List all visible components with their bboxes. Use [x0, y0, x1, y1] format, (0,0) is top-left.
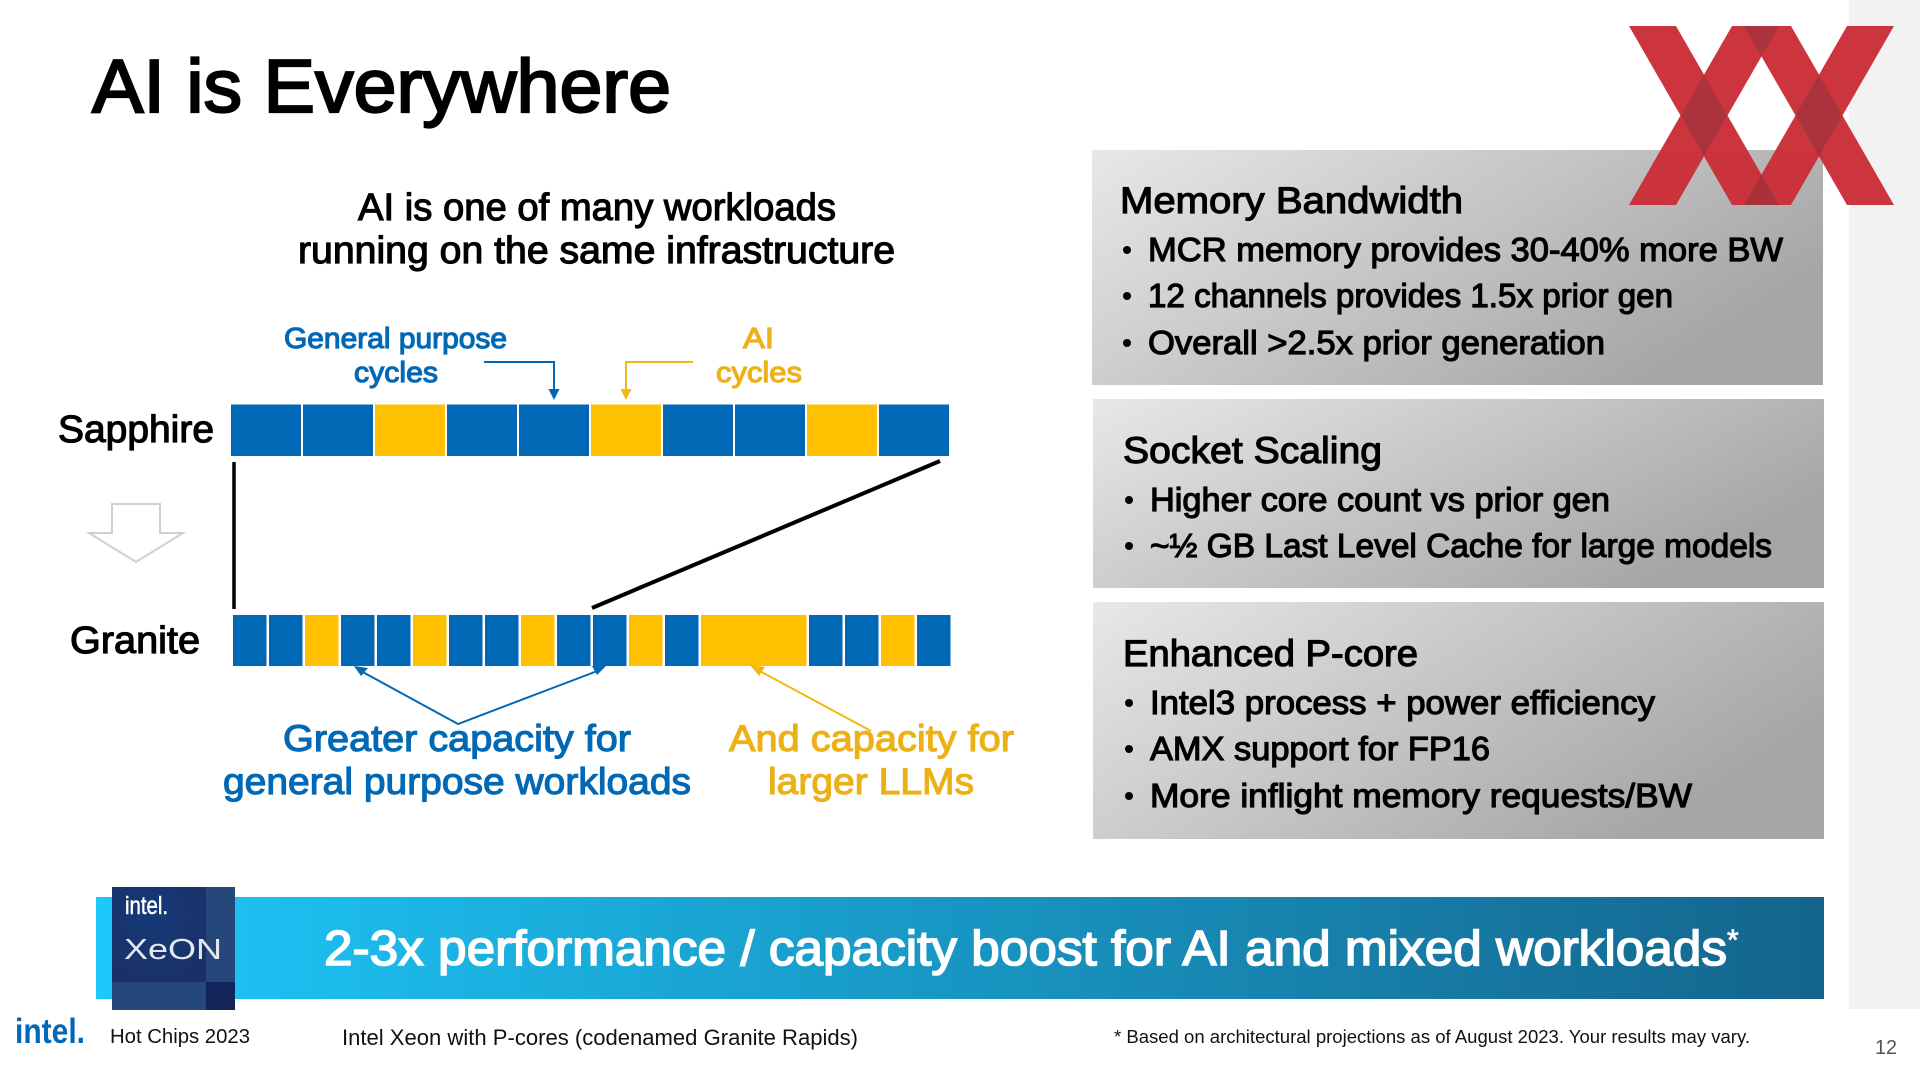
label: AI cycles: AI: [743, 323, 774, 355]
title: AI is Everywhere: [92, 44, 671, 128]
label: AI cycles: cycles: [716, 357, 802, 389]
logo: intel: intel.: [15, 1012, 85, 1051]
footer: product note: Intel Xeon with P-cores (codenamed Granite Rapids): [342, 1025, 858, 1050]
sidebar background: [1849, 0, 1920, 1009]
footer: conference: Hot Chips 2023: [110, 1026, 250, 1048]
arrow: larger LLM capacity: [750, 665, 871, 731]
banner: 2-3x performance / capacity boost for AI and mixed workloads: [324, 922, 1727, 976]
panel: enhanced P-core: Intel3 process + power efficiency: [1150, 684, 1656, 721]
arrows: greater general purpose capacity: [354, 666, 606, 724]
panel: socket scaling: Higher core count vs prior gen: [1150, 481, 1610, 518]
label: general purpose cycles: cycles: [354, 357, 438, 389]
caption: greater capacity: Greater capacity for: [283, 718, 631, 759]
label: Sapphire: Sapphire: [58, 409, 214, 451]
panel: socket scaling: ~½ GB Last Level Cache for large models: [1150, 527, 1772, 564]
subtitle: AI is one of many workloads: [358, 187, 836, 229]
icon: hollow down arrow: [89, 504, 183, 562]
connector lines: [234, 461, 940, 609]
label: AI cycles: [716, 323, 802, 389]
subtitle: running on the same infrastructure: [298, 230, 895, 272]
panel: memory bandwidth: Memory Bandwidth: [1120, 180, 1463, 221]
panel: memory bandwidth: [1092, 150, 1823, 385]
arrow: general purpose cycles: [484, 362, 560, 400]
banner: [96, 897, 1824, 999]
label: Granite: Granite: [70, 620, 200, 662]
caption: larger LLMs: larger LLMs: [768, 761, 974, 802]
panel: socket scaling: Socket Scaling: [1123, 430, 1382, 471]
bar: Sapphire cycles: [231, 404, 949, 456]
icon: Intel Xeon badge: [112, 887, 235, 1010]
icon: Intel Xeon badge: XeON: [124, 934, 222, 966]
panel: memory bandwidth: MCR memory provides 30-40% more BW: [1148, 231, 1784, 268]
caption: larger LLMs: [729, 718, 1014, 802]
caption: larger LLMs: And capacity for: [729, 718, 1014, 759]
panel: enhanced P-core: Enhanced P-core: [1123, 633, 1418, 674]
label: general purpose cycles: General purpose: [284, 323, 507, 355]
page number: 12: [1875, 1037, 1897, 1059]
panel: enhanced P-core: [1093, 602, 1824, 839]
caption: greater capacity: [223, 718, 691, 802]
panel: memory bandwidth: 12 channels provides 1.5x prior gen: [1148, 277, 1673, 314]
icon: red XX mark: [1629, 26, 1894, 205]
icon: Intel Xeon badge: intel.: [125, 892, 168, 920]
footnote: * Based on architectural projections as of August 2023. Your results may vary.: [1114, 1027, 1750, 1047]
subtitle: [298, 187, 895, 272]
caption: greater capacity: general purpose workloads: [223, 761, 691, 802]
banner: *: [1727, 924, 1739, 957]
bar: Granite cycles: [233, 615, 950, 666]
panel: memory bandwidth: Overall >2.5x prior generation: [1148, 324, 1605, 361]
panel: enhanced P-core: AMX support for FP16: [1150, 730, 1490, 767]
panel: socket scaling: [1093, 399, 1824, 588]
panel: enhanced P-core: More inflight memory requests/BW: [1150, 777, 1693, 814]
label: general purpose cycles: [284, 323, 507, 389]
arrow: AI cycles: [620, 362, 693, 400]
